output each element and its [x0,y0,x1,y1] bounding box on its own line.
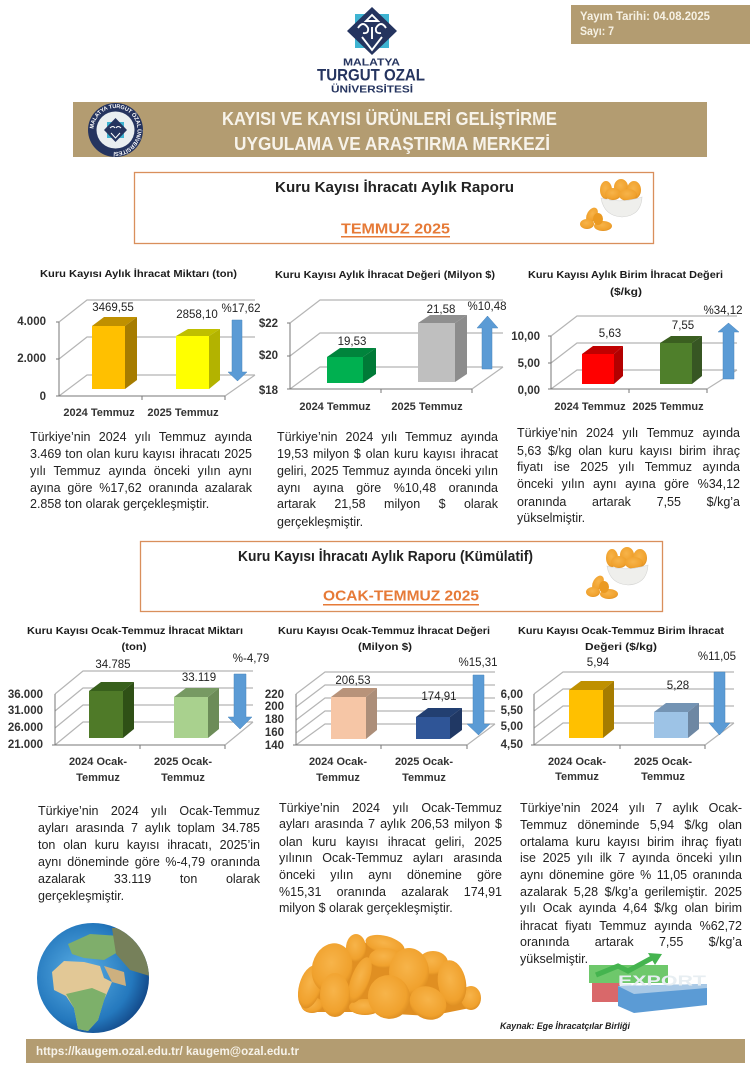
text: monthly value paragraph: Türkiye’nin 2024 yılı Temmuz ayında [277,430,498,444]
chart: monthly export value: 2025 Temmuz [391,401,463,413]
chart: cumulative unit export value: 2025 Ocak- [634,756,692,768]
text: monthly quantity paragraph: ayına göre %17,62 oranında azalarak [30,481,252,495]
chart: cumulative export quantity: Temmuz [161,772,205,784]
chart: cumulative export quantity: 2025 Ocak- [154,756,212,768]
text: cumulative value paragraph: olan kuru kayısı ihracat geliri, 2025 [279,835,502,849]
chart: cumulative export value: 180 [265,714,284,726]
panel: monthly report heading: TEMMUZ 2025 [341,220,450,238]
text: monthly value paragraph: gerçekleşmiştir. [277,515,363,529]
chart: monthly export value [259,268,507,413]
text: monthly unit value paragraph [517,426,740,525]
chart: cumulative unit export value: 6,00 [501,689,523,701]
text: cumulative unit value paragraph: azalarak 5,28 $/kg’a gerilemiştir. 2025 [520,885,742,899]
chart: cumulative export value: 174,91 [421,691,457,703]
chart: monthly export quantity: 3469,55 [92,302,134,314]
arrow: increase [718,323,739,379]
chart: cumulative unit export value: 5,50 [501,705,523,717]
chart: monthly unit export value: ($/kg) [610,286,642,298]
text: cumulative quantity paragraph: azalarak 33.119 ton olarak [38,872,260,886]
icon: round center emblem: MALATYA TURGUT ÖZAL ÜNİVERSİTESİ [90,104,142,157]
text: monthly quantity paragraph: yılı Temmuz ayında önceki yılın aynı [30,464,252,478]
header banner: UYGULAMA VE ARAŞTIRMA MERKEZİ [234,134,550,154]
text: cumulative quantity paragraph [38,804,260,903]
chart: monthly unit export value: 10,00 [511,331,540,343]
panel: cumulative report heading: OCAK-TEMMUZ 2025 [323,588,479,604]
footer bar [26,1039,745,1063]
chart: monthly export quantity: 0 [40,391,46,403]
chart: cumulative export quantity: 26.000 [8,722,43,734]
chart: cumulative unit export value: %11,05 [698,651,736,663]
chart: monthly unit export value [511,268,743,413]
chart: cumulative unit export value: Temmuz [641,771,685,783]
text: cumulative quantity paragraph: ayları arasında 7 aylık toplam 34.785 [38,821,260,835]
chart: cumulative export value [265,624,498,784]
text: cumulative value paragraph [279,801,502,915]
text: cumulative unit value paragraph: aynı dönemine göre % 11,05 oranında [520,868,742,882]
chart: monthly export value: 19,53 [338,336,366,348]
text: monthly quantity paragraph [30,430,252,511]
chart: cumulative export quantity: 33.119 [182,672,216,684]
text: cumulative unit value paragraph: yılı Ocak ayında 4,64 $/kg olan birim [520,901,742,915]
image: earth globe [37,923,150,1033]
text: cumulative unit value paragraph: ihracat fiyatı Temmuz ayında %62,72 [520,919,742,933]
text: monthly unit value paragraph: 5,63 $/kg olan kuru kayısı birim ihraç [517,444,740,458]
date and issue box: Yayım Tarihi: 04.08.2025 [580,11,711,23]
text: monthly unit value paragraph: oranında artarak 7,55 $/kg’a [517,495,740,509]
text: cumulative unit value paragraph: Temmuz döneminde 5,94 $/kg olan [520,818,742,832]
image: export containers: EXPORT [618,972,706,990]
chart: cumulative unit export value: Temmuz [555,771,599,783]
chart: cumulative export quantity: %-4,79 [233,653,269,665]
chart: cumulative export value: 2025 Ocak- [395,756,453,768]
chart: cumulative unit export value: Değeri ($/kg) [585,641,657,653]
text: cumulative quantity paragraph: gerçekleşmiştir. [38,889,124,903]
text: monthly unit value paragraph: yükselmiştir. [517,511,585,525]
chart: cumulative export value: Temmuz [402,772,446,784]
chart: monthly export quantity [17,267,261,419]
text: cumulative unit value paragraph: ise 2025 yılı ilk 7 ayında önceki yılın [520,851,742,865]
chart: monthly unit export value: 0,00 [518,385,540,397]
text: cumulative quantity paragraph: Türkiye’nin 2024 yılı Ocak-Temmuz [38,804,260,818]
text: monthly value paragraph: aynı ayına göre %10,48 oranında [277,481,498,495]
text: cumulative value paragraph: önceki yılın aynı dönemine göre [279,868,502,882]
chart: monthly unit export value: Kuru Kayısı Aylık Birim İhracat Değeri [528,268,723,281]
chart: monthly unit export value: %34,12 [703,305,743,317]
chart: cumulative unit export value: 2024 Ocak- [548,756,606,768]
text: monthly value paragraph: geliri, 2025 Temmuz ayında önceki yılın [277,464,498,478]
chart: cumulative export value: 200 [265,701,284,713]
panel: cumulative report heading [140,542,662,612]
chart: cumulative unit export value [501,624,736,783]
arrow: decrease [709,672,730,735]
university logo: TURGUT OZAL [317,66,425,84]
chart: monthly export quantity: 2.000 [17,353,46,365]
chart: cumulative export value: Temmuz [316,772,360,784]
chart: cumulative export quantity: (ton) [122,641,146,653]
text: cumulative unit value paragraph: ortalama kuru kayısı birim ihraç fiyatı [520,835,742,849]
chart: cumulative export value: %15,31 [458,657,498,669]
text: monthly value paragraph: 19,53 milyon $ olan kuru kayısı ihracat [277,447,498,461]
chart: cumulative unit export value: 5,94 [587,657,610,669]
chart: monthly export value: 21,58 [427,304,455,316]
image: export containers [589,953,707,1013]
icon: apricot bowl [580,179,642,231]
university logo: MALATYA [343,58,400,68]
chart: cumulative export quantity: Kuru Kayısı Ocak-Temmuz İhracat Miktarı [27,624,243,637]
chart: monthly export value: Kuru Kayısı Aylık İhracat Değeri (Milyon $) [275,268,495,281]
chart: monthly unit export value: 2025 Temmuz [632,401,704,413]
text: monthly quantity paragraph: 3.469 ton olan kuru kayısı ihracatı 2025 [30,447,252,461]
text: cumulative unit value paragraph: yükselmiştir. [520,952,588,966]
chart: cumulative export quantity: Temmuz [76,772,120,784]
chart: cumulative export quantity [8,624,269,784]
image: dried apricots pile [294,931,481,1026]
text: cumulative value paragraph: Türkiye’nin 2024 yılı Ocak-Temmuz [279,801,502,815]
chart: cumulative export quantity: 2024 Ocak- [69,756,127,768]
university logo [317,7,425,96]
chart: cumulative export value: 140 [265,740,284,752]
chart: cumulative unit export value: 5,28 [667,680,689,692]
source note: Kaynak: Ege İhracatçılar Birliği [500,1021,631,1031]
chart: monthly unit export value: 7,55 [672,320,694,332]
chart: cumulative export value: 220 [265,689,284,701]
text: cumulative quantity paragraph: aynı döneminde göre %-4,79 oranında [38,855,260,869]
chart: cumulative export value: 160 [265,727,284,739]
chart: monthly export quantity: 2024 Temmuz [63,407,135,419]
header banner [73,102,707,157]
chart: monthly export value: $18 [259,385,279,397]
chart: monthly export quantity: 4.000 [17,316,46,328]
text: cumulative unit value paragraph [520,801,742,966]
chart: monthly export quantity: 2858,10 [176,309,218,321]
chart: monthly unit export value: 2024 Temmuz [554,401,626,413]
text: monthly unit value paragraph: fiyatı ise 2025 yılı Temmuz ayında [517,460,740,474]
chart: monthly export quantity: 2025 Temmuz [147,407,219,419]
chart: cumulative export quantity: 31.000 [8,705,43,717]
date and issue box [571,5,750,44]
chart: monthly export quantity: Kuru Kayısı Aylık İhracat Miktarı (ton) [40,267,237,280]
chart: cumulative export quantity: 36.000 [8,689,43,701]
text: monthly value paragraph: artarak 21,58 milyon $ olarak [277,497,498,511]
panel: monthly report heading: Kuru Kayısı İhracatı Aylık Raporu [275,179,514,196]
text: cumulative value paragraph: yılının Ocak-Temmuz ayları arasında [279,851,502,865]
text: cumulative unit value paragraph: Türkiye’nin 2024 yılı 7 aylık Ocak- [520,801,742,815]
chart: cumulative export value: (Milyon $) [358,641,412,653]
header banner: KAYISI VE KAYISI ÜRÜNLERİ GELİŞTİRME [222,109,557,129]
text: cumulative value paragraph: ayları arasında 7 aylık 206,53 milyon $ [279,817,502,831]
text: monthly quantity paragraph: Türkiye’nin 2024 yılı Temmuz ayında [30,430,252,444]
chart: cumulative unit export value: 5,00 [501,721,523,733]
chart: cumulative export quantity: 34.785 [95,659,131,671]
text: cumulative unit value paragraph: oranında artarak 7,55 $/kg’a [520,935,742,949]
arrow: decrease [467,675,490,735]
text: cumulative value paragraph: milyon $ olarak gerçekleşmiştir. [279,901,453,915]
date and issue box: Sayı: 7 [580,26,614,38]
chart: monthly export value: $20 [259,350,278,362]
text: cumulative value paragraph: %15,31 oranında azalarak 174,91 [279,885,502,899]
chart: monthly unit export value: 5,00 [518,358,540,370]
icon: apricot bowl [586,547,648,599]
text: monthly quantity paragraph: 2.858 ton olarak gerçekleşmiştir. [30,497,209,511]
text: cumulative quantity paragraph: ton olan kuru kayısı ihracatı, 2025’in [38,838,260,852]
panel: cumulative report heading: Kuru Kayısı İhracatı Aylık Raporu (Kümülatif) [238,548,533,565]
chart: monthly export value: $22 [259,318,278,330]
text: monthly unit value paragraph: önceki yılın aynı ayına göre %34,12 [517,477,740,491]
chart: monthly export quantity: %17,62 [221,303,261,315]
text: monthly value paragraph [277,430,498,529]
panel: monthly report heading [134,172,654,244]
chart: cumulative export quantity: 21.000 [8,739,43,751]
text: monthly unit value paragraph: Türkiye’nin 2024 yılı Temmuz ayında [517,426,740,440]
chart: cumulative export value: 2024 Ocak- [309,756,367,768]
university logo: ÜNİVERSİTESİ [331,82,413,96]
arrow: increase [477,316,498,369]
chart: cumulative unit export value: 4,50 [501,739,523,751]
arrow: decrease [228,674,252,729]
arrow: decrease [228,320,247,381]
footer bar: https://kaugem.ozal.edu.tr/ kaugem@ozal.edu.tr [36,1046,300,1058]
chart: monthly export value: 2024 Temmuz [299,401,371,413]
chart: monthly unit export value: 5,63 [599,328,621,340]
chart: cumulative unit export value: Kuru Kayısı Ocak-Temmuz Birim İhracat [518,624,725,637]
chart: cumulative export value: Kuru Kayısı Ocak-Temmuz İhracat Değeri [278,624,490,637]
chart: cumulative export value: 206,53 [335,675,371,687]
chart: monthly export value: %10,48 [467,301,507,313]
